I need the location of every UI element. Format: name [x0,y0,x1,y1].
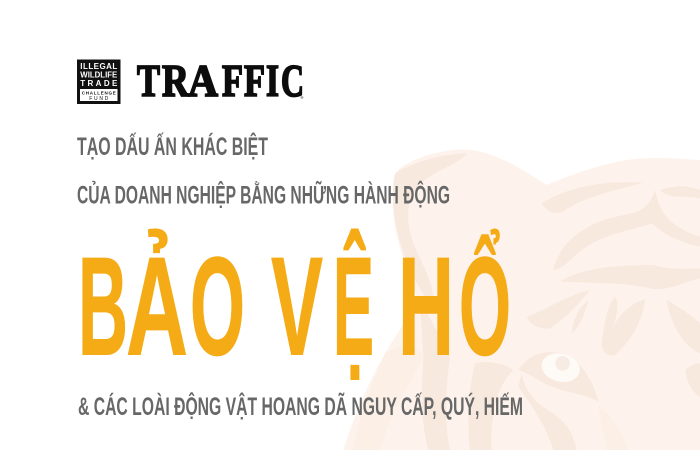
logo: TRAFFIC wordmark: F [222,56,243,106]
logo: Illegal Wildlife Trade Challenge Fund: WILDLIFE [80,70,118,80]
logo: TRAFFIC wordmark [137,56,304,106]
logo: Illegal Wildlife Trade Challenge Fund: ILLEGAL [80,62,117,71]
text: first intro line: TẠO DẤU ẤN KHÁC BIỆT [77,131,268,161]
title: O [190,228,245,384]
logo: Illegal Wildlife Trade Challenge Fund: TRADE [80,79,118,88]
illustration: tiger face watermark [343,149,700,450]
title [78,228,511,384]
title: V [271,228,323,384]
text: second intro line: CỦA DOANH NGHIỆP BẰNG NHỮNG HÀNH ĐỘNG [77,180,450,210]
logo: Illegal Wildlife Trade Challenge Fund [77,60,120,104]
title: Ệ [333,228,374,384]
logo: TRAFFIC wordmark: R [162,56,189,106]
title: Ả [126,228,188,384]
title: B [78,228,128,384]
icon: tiger eye [539,349,583,386]
logo: Illegal Wildlife Trade Challenge Fund: FUND [89,96,109,102]
logo: TRAFFIC wordmark: ® [300,95,304,100]
logo: TRAFFIC wordmark: F [244,56,265,106]
title: H [398,228,454,384]
logo: TRAFFIC wordmark: A [188,56,218,106]
infographic page: Ổ [459,228,511,384]
logo: TRAFFIC wordmark: T [137,56,160,106]
logo: TRAFFIC wordmark: I [266,56,279,106]
logo: Illegal Wildlife Trade Challenge Fund: CHALLENGE [82,90,116,96]
logo: TRAFFIC wordmark: C [281,56,304,106]
